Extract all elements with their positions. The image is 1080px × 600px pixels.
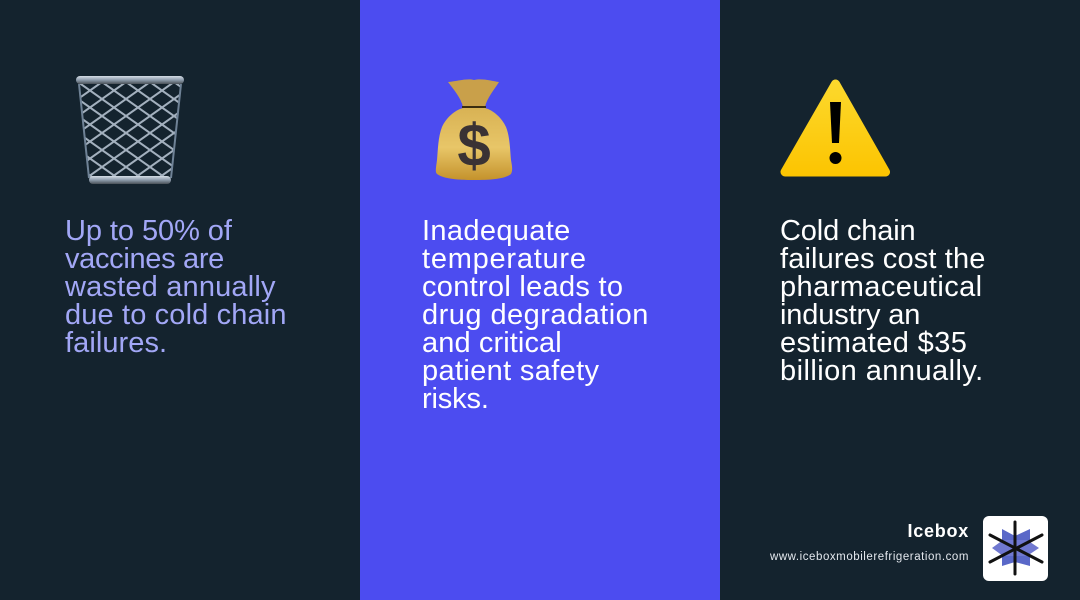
dollar sign: $ <box>457 112 491 179</box>
text: vaccines wasted: due to cold chain <box>65 299 287 331</box>
icon: money bag <box>436 79 512 180</box>
text: temperature control: temperature <box>422 243 587 275</box>
text: vaccines wasted: Up to 50% of <box>65 215 232 247</box>
text: temperature control: control leads to <box>422 271 623 303</box>
icon: warning triangle <box>780 80 890 176</box>
icon: wastebasket <box>76 76 184 184</box>
panel: industry cost <box>720 0 1080 600</box>
text: vaccines wasted: vaccines are <box>65 243 224 275</box>
text: vaccines wasted: wasted annually <box>65 271 276 303</box>
panel: drug degradation <box>360 0 720 600</box>
text: cost of failures: estimated $35 <box>780 327 967 359</box>
text: cost of failures: billion annually. <box>780 355 984 387</box>
panel: vaccine waste <box>0 0 360 600</box>
text: vaccines wasted: failures. <box>65 327 167 359</box>
text: cost of failures: failures cost the <box>780 243 985 275</box>
text: temperature control <box>422 215 649 415</box>
logo <box>983 516 1048 581</box>
text: temperature control: patient safety <box>422 355 599 387</box>
text: cost of failures: pharmaceutical <box>780 271 983 303</box>
text: temperature control: risks. <box>422 383 489 415</box>
text: temperature control: Inadequate <box>422 215 571 247</box>
website url: www.iceboxmobilerefrigeration.com <box>770 551 969 563</box>
text: cost of failures <box>780 215 985 387</box>
brand name: Icebox <box>907 521 969 541</box>
text: temperature control: drug degradation <box>422 299 649 331</box>
text: cost of failures: Cold chain <box>780 215 916 247</box>
text: temperature control: and critical <box>422 327 562 359</box>
text: cost of failures: industry an <box>780 299 920 331</box>
text: vaccines wasted <box>65 215 287 359</box>
